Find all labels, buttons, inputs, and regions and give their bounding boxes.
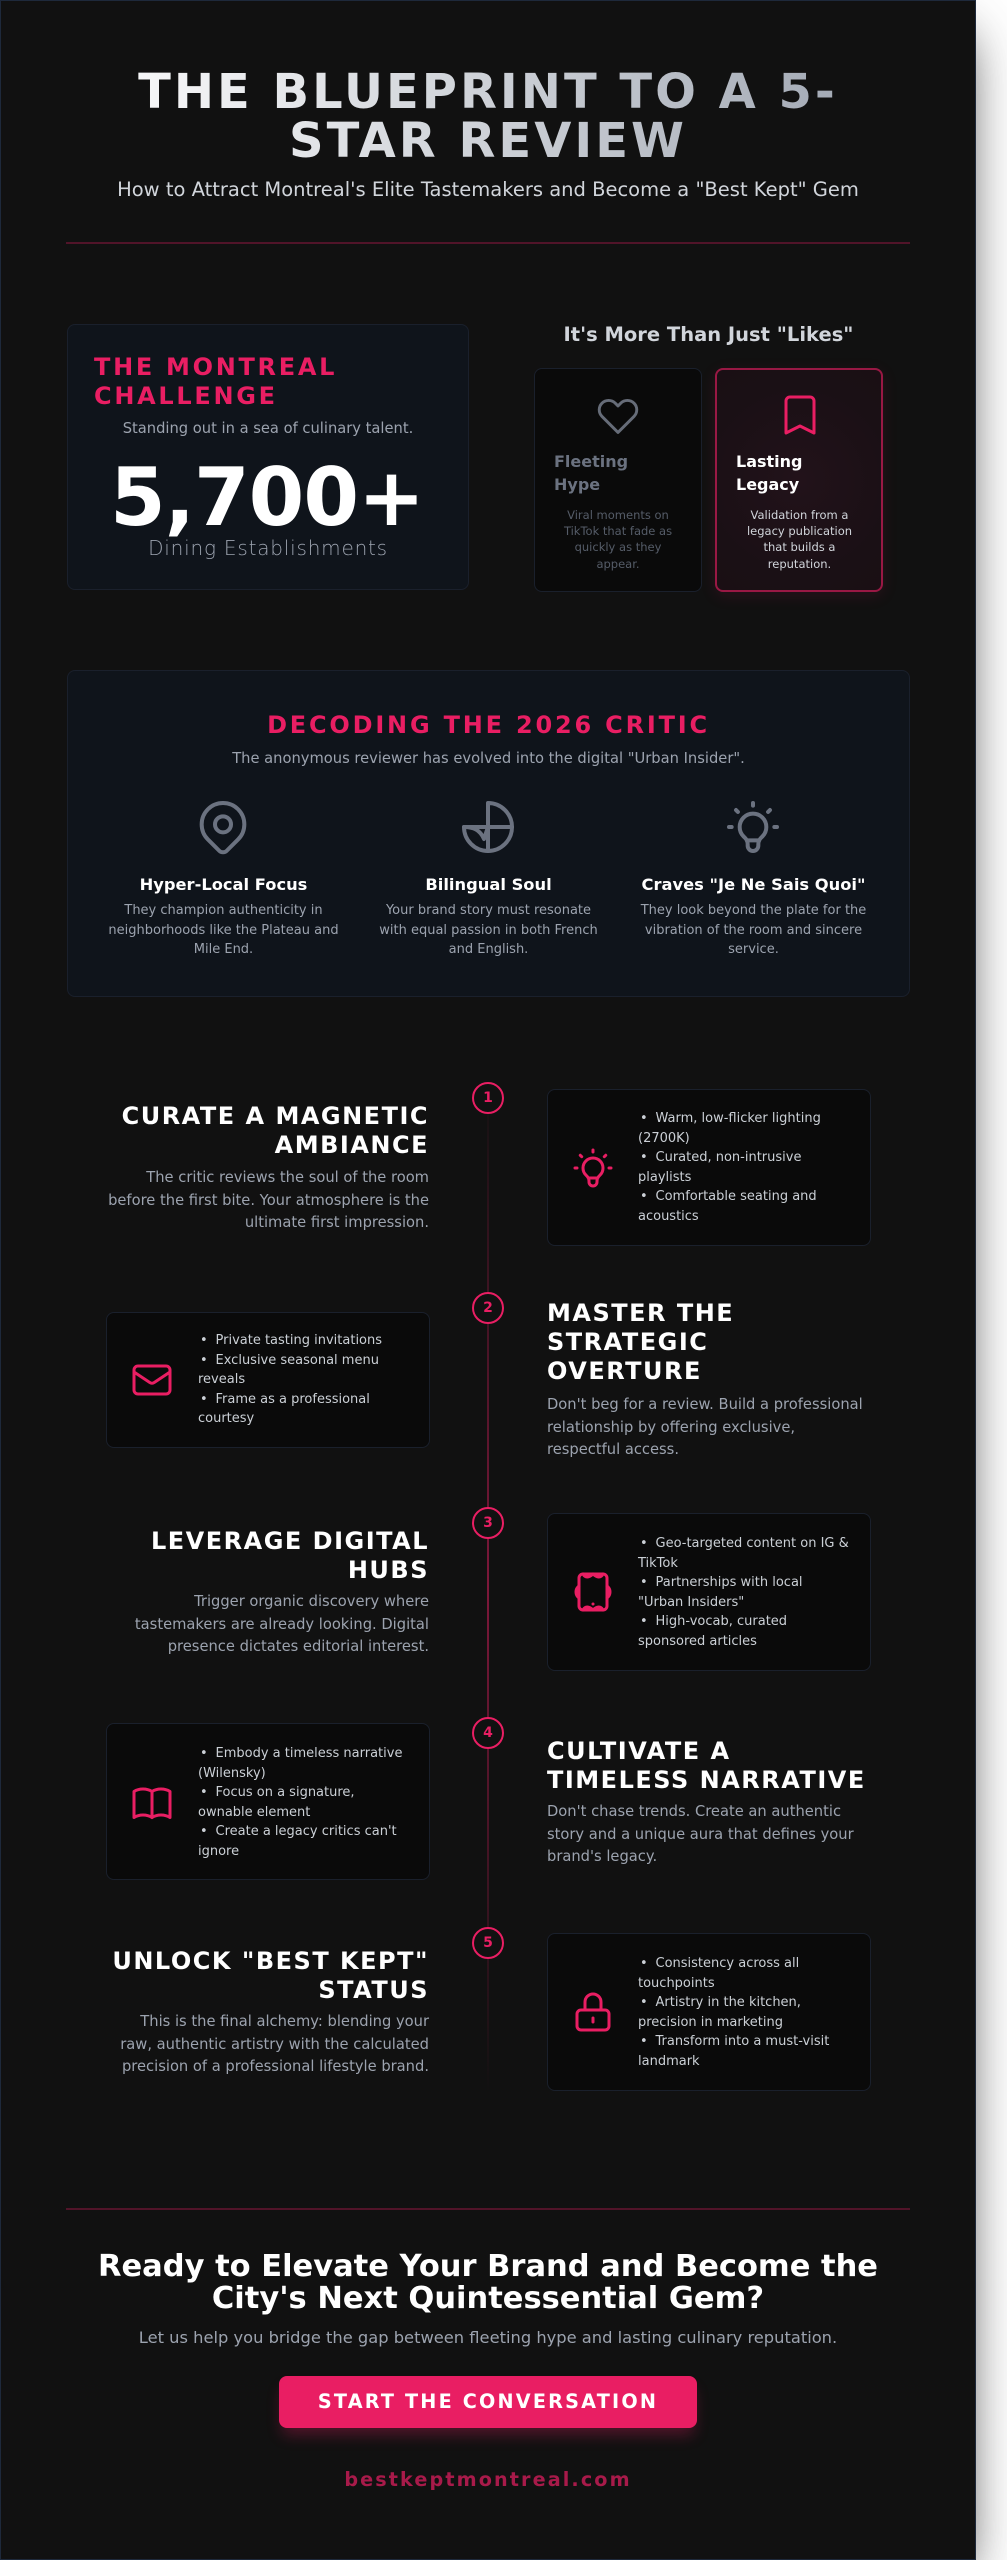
- column: je ne sais quoi: They look beyond the plate for the: [641, 903, 866, 918]
- step 2 list: Exclusive seasonal menu: [216, 1353, 379, 1368]
- step 1 list: •: [640, 1189, 648, 1204]
- step 5 card: [547, 1933, 871, 2091]
- challenge subtext: Standing out in a sea of culinary talent.: [123, 420, 413, 437]
- step 3 text: presence dictates editorial interest.: [168, 1638, 429, 1655]
- step 2 heading: OVERTURE: [547, 1357, 702, 1385]
- call-to-action button: [279, 2376, 697, 2428]
- step 3 text: Trigger organic discovery where: [194, 1593, 429, 1610]
- closing subtext: Let us help you bridge the gap between fleeting hype and lasting culinary reputation.: [139, 2328, 837, 2347]
- step 5 list: •: [640, 1956, 648, 1971]
- step 2 heading: [547, 1299, 734, 1385]
- column: hyper-local focus: neighborhoods like the Plateau and: [108, 923, 339, 938]
- column: hyper-local focus: Hyper-Local Focus: [140, 875, 307, 894]
- column: bilingual soul: [379, 801, 598, 957]
- step 5 list: •: [640, 1995, 648, 2010]
- column: hyper-local focus: They champion authenticity in: [124, 903, 323, 918]
- step 2 text: relationship by offering exclusive,: [547, 1419, 795, 1436]
- step 4 list: ignore: [198, 1844, 239, 1859]
- fleeting hype text: Viral moments on: [567, 508, 669, 522]
- icon: envelope: [132, 1364, 172, 1396]
- step 4 text: brand's legacy.: [547, 1848, 657, 1865]
- step 1 text: The critic reviews the soul of the room: [146, 1169, 429, 1186]
- step 3 number: 3: [483, 1515, 493, 1531]
- closing heading: Ready to Elevate Your Brand and Become the: [98, 2248, 878, 2284]
- website address: bestkeptmontreal.com: [344, 2468, 632, 2491]
- step 4 number: [472, 1717, 504, 1749]
- step 2 number: [472, 1292, 504, 1324]
- step 5 text: raw, authentic artistry with the calculated: [120, 2036, 429, 2053]
- step 3 heading: LEVERAGE DIGITAL: [151, 1526, 429, 1554]
- step 1 card: [547, 1089, 871, 1246]
- step 5 list: touchpoints: [638, 1976, 715, 1991]
- step 4 list: ownable element: [198, 1805, 310, 1820]
- title: THE BLUEPRINT TO A 5-: [138, 64, 838, 120]
- step 1 number: [472, 1082, 504, 1114]
- step 3 text: [135, 1593, 429, 1655]
- step 3 heading: HUBS: [348, 1556, 429, 1584]
- lasting legacy text: reputation.: [768, 557, 831, 571]
- step 1 list: [638, 1111, 821, 1224]
- step 2 list: [198, 1333, 382, 1426]
- column: hyper-local focus: [108, 801, 339, 957]
- icon: light bulb: [574, 1148, 612, 1188]
- step 5 list: •: [640, 2034, 648, 2049]
- step 4 list: •: [200, 1746, 208, 1761]
- step 4 list: Focus on a signature,: [216, 1785, 355, 1800]
- lasting legacy title: Lasting: [736, 452, 802, 471]
- step 3 list: Partnerships with local: [656, 1575, 803, 1590]
- column: hyper-local focus: Mile End.: [194, 942, 253, 957]
- heading: the Montreal challenge: THE MONTREAL: [94, 352, 337, 380]
- step 4 text: Don't chase trends. Create an authentic: [547, 1803, 841, 1820]
- icon: open book: [132, 1788, 172, 1820]
- step 5 text: [120, 2013, 430, 2075]
- step 5 list: [638, 1956, 830, 2069]
- fleeting hype text: [564, 508, 672, 571]
- step 5 list: Artistry in the kitchen,: [656, 1995, 801, 2010]
- step 1 text: before the first bite. Your atmosphere is the: [108, 1192, 429, 1209]
- step 3 list: Geo-targeted content on IG &: [656, 1536, 849, 1551]
- stat: 5,700+: 5,700+: [110, 451, 424, 544]
- step 1 number: 1: [483, 1090, 493, 1106]
- lasting legacy text: that builds a: [764, 540, 835, 554]
- step 3 card: [547, 1513, 871, 1671]
- call-to-action button: START THE CONVERSATION: [318, 2390, 658, 2413]
- lasting legacy text: legacy publication: [747, 524, 852, 538]
- heading: more than likes: It's More Than Just "Likes": [564, 323, 853, 346]
- step 2 card: [106, 1312, 430, 1448]
- step 4 list: (Wilensky): [198, 1766, 266, 1781]
- step 4 list: Create a legacy critics can't: [216, 1824, 397, 1839]
- step 4 list: •: [200, 1785, 208, 1800]
- step 3 list: High-vocab, curated: [656, 1614, 787, 1629]
- column: bilingual soul: and English.: [449, 942, 528, 957]
- column: je ne sais quoi: service.: [728, 942, 779, 957]
- stat label: Dining Establishments: [148, 536, 388, 560]
- icon: mobile device: [574, 1572, 612, 1612]
- step 3 list: •: [640, 1575, 648, 1590]
- step 5 text: precision of a professional lifestyle brand.: [122, 2058, 429, 2075]
- step 4 number: 4: [483, 1725, 493, 1741]
- step 3 number: [472, 1507, 504, 1539]
- step 2 list: •: [200, 1353, 208, 1368]
- icon: padlock: [576, 1992, 610, 2032]
- step 1 list: playlists: [638, 1170, 691, 1185]
- step 1 list: Curated, non-intrusive: [656, 1150, 801, 1165]
- icon: segmented pie: [462, 801, 514, 853]
- step 5 list: precision in marketing: [638, 2015, 783, 2030]
- step 4 list: •: [200, 1824, 208, 1839]
- step 1 list: (2700K): [638, 1131, 690, 1146]
- panel: fleeting hype: [534, 368, 702, 592]
- step 2 list: Private tasting invitations: [216, 1333, 382, 1348]
- step 3 list: "Urban Insiders": [638, 1595, 744, 1610]
- heading: the Montreal challenge: CHALLENGE: [94, 382, 278, 410]
- step 4 heading: CULTIVATE A: [547, 1736, 731, 1764]
- step 1 heading: AMBIANCE: [275, 1130, 429, 1158]
- step 5 text: This is the final alchemy: blending your: [140, 2013, 429, 2030]
- step 2 list: courtesy: [198, 1411, 254, 1426]
- heading: the Montreal challenge: [94, 352, 337, 410]
- step 4 list: [198, 1746, 402, 1859]
- step 5 list: Consistency across all: [656, 1956, 799, 1971]
- fleeting hype text: appear.: [596, 557, 640, 571]
- step 2 list: •: [200, 1392, 208, 1407]
- icon: heart: [598, 399, 638, 434]
- panel: lasting legacy: [715, 368, 883, 592]
- step 2 heading: STRATEGIC: [547, 1328, 708, 1356]
- fleeting hype text: TikTok that fade as: [564, 524, 672, 538]
- step 3 list: TikTok: [638, 1556, 678, 1571]
- step 3 list: sponsored articles: [638, 1634, 757, 1649]
- fleeting hype title: Hype: [554, 475, 600, 494]
- step 4 text: story and a unique aura that defines your: [547, 1826, 854, 1843]
- step 2 text: respectful access.: [547, 1441, 679, 1458]
- step 4 heading: TIMELESS NARRATIVE: [547, 1766, 866, 1794]
- step 5 heading: UNLOCK "BEST KEPT": [112, 1946, 429, 1974]
- step 2 list: •: [200, 1333, 208, 1348]
- column: bilingual soul: with equal passion in both French: [379, 923, 598, 938]
- lasting legacy text: Validation from a: [751, 508, 848, 522]
- step 1 list: •: [640, 1111, 648, 1126]
- closing heading: City's Next Quintessential Gem?: [212, 2280, 764, 2316]
- timeline line: [487, 1082, 489, 2092]
- subtitle: How to Attract Montreal's Elite Tastemakers and Become a "Best Kept" Gem: [117, 178, 859, 201]
- step 3 text: tastemakers are already looking. Digital: [135, 1616, 429, 1633]
- critic subtext: The anonymous reviewer has evolved into the digital "Urban Insider".: [232, 750, 745, 767]
- step 1 list: Comfortable seating and: [656, 1189, 817, 1204]
- column: bilingual soul: Your brand story must resonate: [386, 903, 591, 918]
- step 2 list: reveals: [198, 1372, 245, 1387]
- column: je ne sais quoi: [640, 801, 866, 957]
- title: STAR REVIEW: [289, 113, 687, 169]
- panel: decoding the 2026 critic: [67, 670, 910, 997]
- heading: decoding the critic: DECODING THE 2026 CRITIC: [267, 711, 710, 739]
- step 1 list: •: [640, 1150, 648, 1165]
- step 2 heading: MASTER THE: [547, 1299, 734, 1327]
- column: je ne sais quoi: Craves "Je Ne Sais Quoi": [642, 875, 865, 894]
- step 4 list: Embody a timeless narrative: [216, 1746, 402, 1761]
- icon: map pin: [200, 801, 246, 854]
- step 2 number: 2: [483, 1300, 493, 1316]
- step 4 card: [106, 1723, 430, 1880]
- step 5 heading: [112, 1946, 429, 2004]
- step 2 text: [547, 1396, 863, 1458]
- step 3 list: •: [640, 1536, 648, 1551]
- step 1 list: Warm, low-flicker lighting: [656, 1111, 821, 1126]
- column: bilingual soul: Bilingual Soul: [425, 875, 552, 894]
- step 1 text: ultimate first impression.: [245, 1214, 429, 1231]
- panel: the Montreal challenge: [67, 324, 469, 590]
- title: [66, 68, 910, 166]
- icon: bookmark: [784, 396, 816, 435]
- fleeting hype text: quickly as they: [575, 540, 661, 554]
- step 3 heading: [151, 1526, 429, 1584]
- step 3 list: [638, 1536, 849, 1649]
- fleeting hype title: Fleeting: [554, 452, 628, 471]
- closing heading: [98, 2248, 878, 2316]
- step 2 list: Frame as a professional: [216, 1392, 370, 1407]
- step 5 number: 5: [483, 1935, 493, 1951]
- step 5 number: [472, 1927, 504, 1959]
- lasting legacy text: [747, 508, 852, 571]
- step 5 list: landmark: [638, 2054, 700, 2069]
- fleeting hype title: [554, 452, 628, 494]
- step 5 heading: STATUS: [318, 1976, 429, 2004]
- step 1 text: [108, 1169, 429, 1231]
- step 5 list: Transform into a must-visit: [656, 2034, 829, 2049]
- lasting legacy title: [736, 452, 802, 494]
- step 4 text: [547, 1803, 854, 1865]
- step 4 heading: [547, 1736, 866, 1794]
- step 1 heading: [122, 1102, 429, 1158]
- step 1 heading: CURATE A MAGNETIC: [122, 1102, 429, 1130]
- column: je ne sais quoi: vibration of the room and sincere: [645, 923, 862, 938]
- step 3 list: •: [640, 1614, 648, 1629]
- icon: light bulb: [727, 801, 779, 853]
- step 1 list: acoustics: [638, 1209, 699, 1224]
- lasting legacy title: Legacy: [736, 475, 799, 494]
- step 2 text: Don't beg for a review. Build a professional: [547, 1396, 863, 1413]
